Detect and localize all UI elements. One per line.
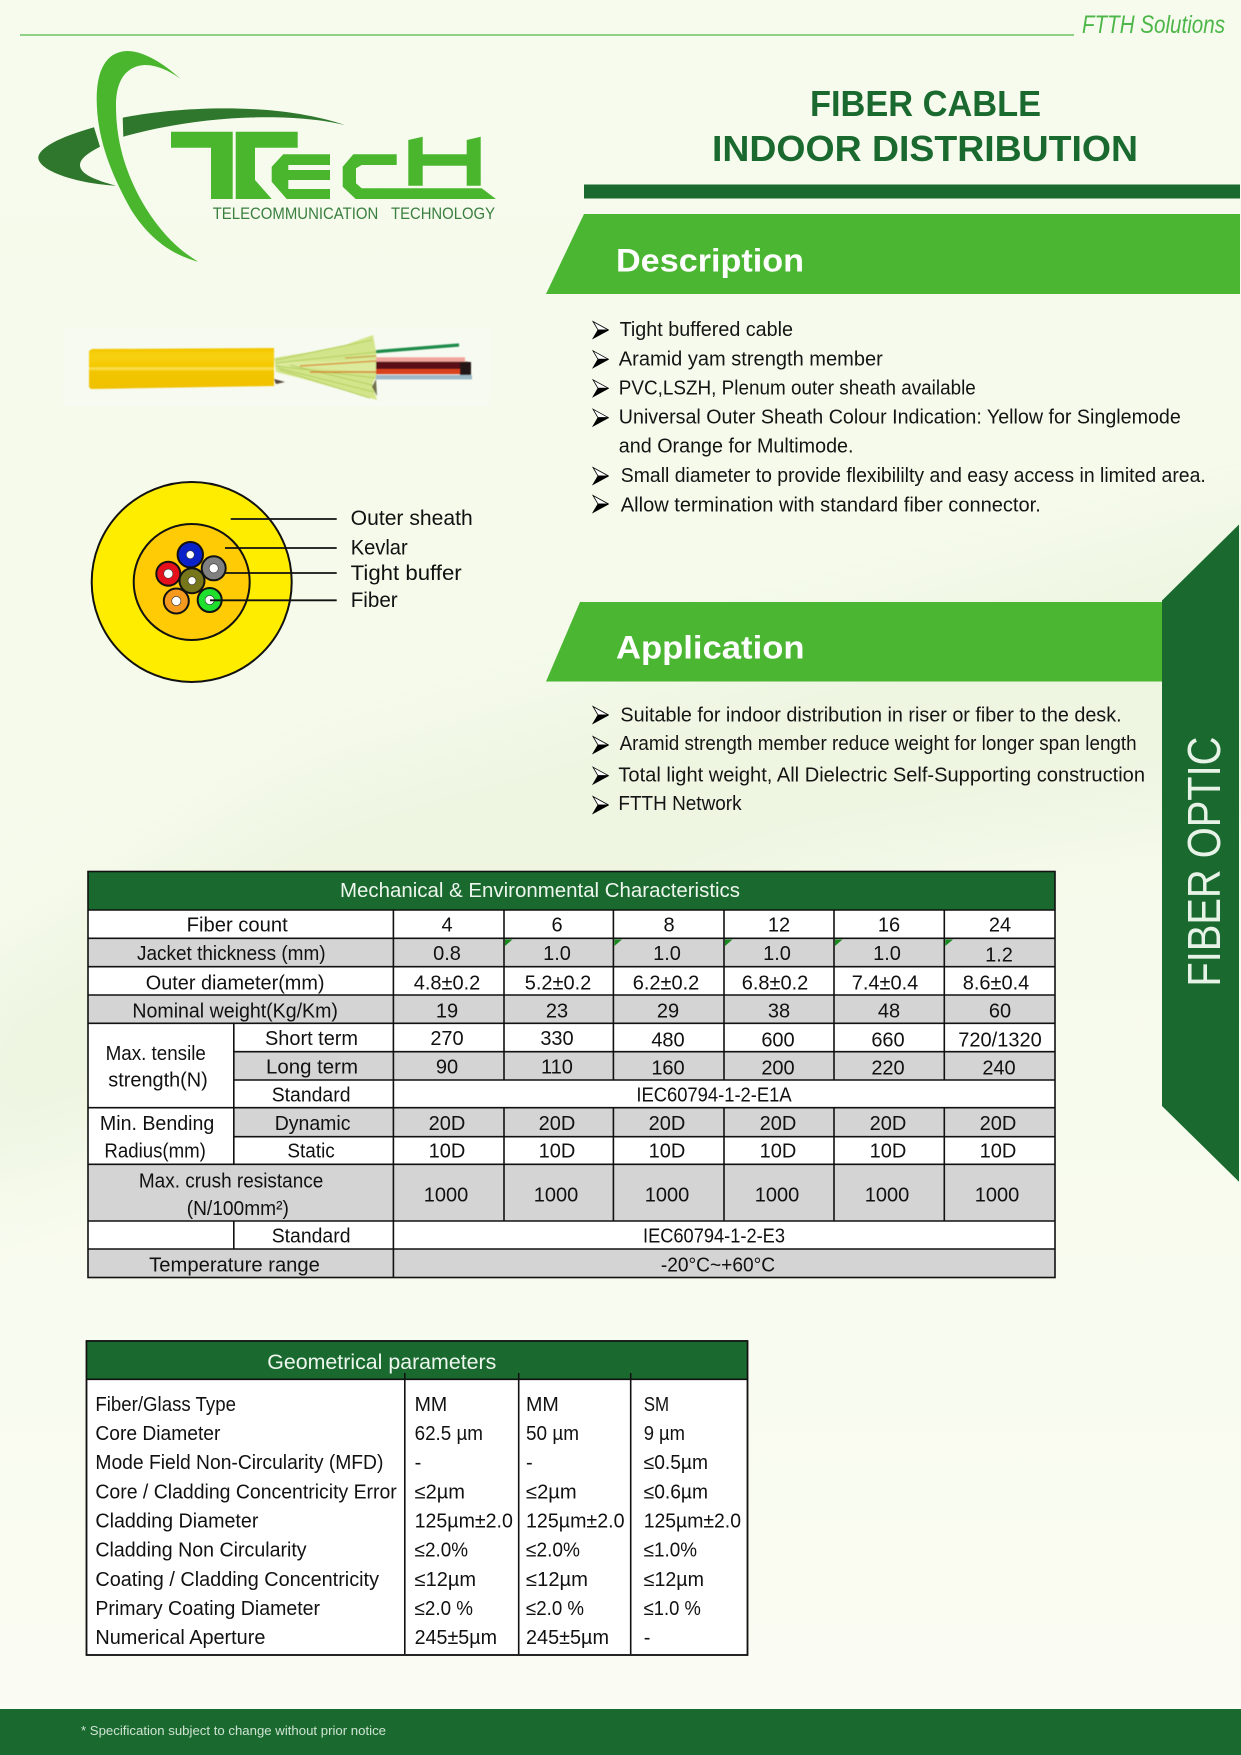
description bullets: Aramid yam strength member <box>619 348 883 370</box>
table values: 10D <box>539 1141 575 1163</box>
parameter names: Core Diameter <box>95 1423 221 1445</box>
description bullets: Tight buffered cable <box>620 319 793 341</box>
column 1 values: 125µm±2.0 <box>415 1510 513 1532</box>
parameter names: Fiber/Glass Type <box>95 1394 236 1416</box>
table values: 10D <box>649 1141 685 1163</box>
description bullets: Universal Outer Sheath Colour Indication: Yellow for Singlemode <box>619 406 1181 428</box>
row labels: (N/100mm²) <box>187 1198 289 1220</box>
table values: 0.8 <box>433 943 461 965</box>
column 3 values: 125µm±2.0 <box>644 1510 741 1532</box>
table values: 720/1320 <box>958 1030 1042 1052</box>
diagram labels <box>351 507 473 612</box>
footer band <box>0 1709 1241 1755</box>
side band: fiber optic: FIBER OPTIC <box>1178 737 1230 987</box>
table values: 20D <box>980 1113 1016 1135</box>
description banner: Description <box>616 242 804 278</box>
column 2 values: 50 µm <box>526 1423 579 1445</box>
table values: 8 <box>663 915 675 937</box>
column 1 values: ≤2µm <box>415 1481 465 1503</box>
table values: 10D <box>980 1141 1016 1163</box>
table values: -20°C~+60°C <box>661 1255 775 1277</box>
column 2 values: ≤2µm <box>526 1481 577 1503</box>
description bullets: Small diameter to provide flexibililty and easy access in limited area. <box>621 465 1206 487</box>
table values <box>414 915 1042 1277</box>
column 2 values: ≤2.0% <box>526 1540 580 1562</box>
table values: 4.8±0.2 <box>414 972 480 994</box>
table values: 24 <box>989 915 1011 937</box>
parameter names: Mode Field Non-Circularity (MFD) <box>95 1452 383 1474</box>
table values: 48 <box>878 1000 900 1022</box>
table grid <box>88 872 1055 1278</box>
row labels: Temperature range <box>149 1255 320 1277</box>
application bullets: Suitable for indoor distribution in riser or fiber to the desk. <box>620 705 1122 727</box>
description bullets: and Orange for Multimode. <box>619 435 854 457</box>
parameter names <box>95 1394 397 1649</box>
table values: 1000 <box>534 1185 578 1207</box>
table values: 220 <box>871 1058 905 1080</box>
parameter names: Cladding Non Circularity <box>95 1540 307 1562</box>
row labels: Standard <box>272 1225 350 1247</box>
table values: 480 <box>651 1030 685 1052</box>
row labels: Max. tensile <box>106 1043 206 1065</box>
table values: IEC60794-1-2-E1A <box>636 1085 792 1107</box>
parameter names: Primary Coating Diameter <box>95 1598 320 1620</box>
logo: Tech: TELECOMMUNICATION <box>213 205 378 223</box>
tight buffers <box>156 542 226 614</box>
diagram labels: Fiber <box>351 589 398 612</box>
table values: 10D <box>870 1141 906 1163</box>
table values: 20D <box>429 1113 465 1135</box>
row labels: Radius(mm) <box>104 1141 206 1163</box>
table values: 16 <box>878 915 900 937</box>
table values: 20D <box>649 1113 685 1135</box>
application banner <box>546 602 1163 682</box>
parameter names: Core / Cladding Concentricity Error <box>95 1481 397 1503</box>
column 2 values: 125µm±2.0 <box>526 1510 624 1532</box>
table values: 1000 <box>865 1185 909 1207</box>
table: mechanical and environmental characteristics <box>88 872 1055 1278</box>
table values: 160 <box>651 1058 685 1080</box>
cable photo <box>63 328 490 406</box>
table values: 6 <box>551 915 563 937</box>
row labels: Nominal weight(Kg/Km) <box>132 1000 338 1022</box>
logo: Tech <box>38 51 496 262</box>
column 3 values: ≤12µm <box>644 1569 704 1591</box>
row labels: strength(N) <box>108 1070 208 1092</box>
table values: 7.4±0.4 <box>852 972 918 994</box>
row labels: Jacket thickness (mm) <box>137 943 326 965</box>
table values: 1.2 <box>985 944 1013 966</box>
table values: 20D <box>870 1113 906 1135</box>
column 1 values: - <box>415 1452 421 1474</box>
table values: 240 <box>982 1058 1016 1080</box>
parameter names: Coating / Cladding Concentricity <box>95 1569 379 1591</box>
side band: fiber optic <box>1162 524 1239 1182</box>
table values: 23 <box>546 1000 568 1022</box>
column 3 values: ≤1.0 % <box>644 1598 701 1620</box>
table values: 20D <box>760 1113 796 1135</box>
table values: 12 <box>768 915 790 937</box>
outer sheath <box>92 482 292 682</box>
table fills <box>88 872 1055 1278</box>
table values: 1.0 <box>873 943 901 965</box>
table values: 38 <box>768 1000 790 1022</box>
panel: description <box>546 214 1240 516</box>
table values: 6.2±0.2 <box>633 972 699 994</box>
column 3 values <box>644 1394 741 1649</box>
description bullets <box>593 319 1206 516</box>
column 2 values: ≤2.0 % <box>526 1598 584 1620</box>
column 1 values: ≤12µm <box>415 1569 476 1591</box>
table body <box>86 1341 748 1655</box>
table values: 1000 <box>755 1185 799 1207</box>
table values: 660 <box>871 1030 905 1052</box>
title: FIBER CABLE <box>810 83 1041 124</box>
application banner: Application <box>616 629 804 665</box>
application bullets: Aramid strength member reduce weight for longer span length <box>620 733 1137 755</box>
row labels <box>100 915 358 1277</box>
table values: 600 <box>761 1030 795 1052</box>
table values: 29 <box>657 1000 679 1022</box>
diagram labels: Outer sheath <box>351 507 473 530</box>
column 2 values: MM <box>526 1394 559 1416</box>
table values: 60 <box>989 1000 1011 1022</box>
table values: 330 <box>540 1028 574 1050</box>
table values: 90 <box>436 1056 458 1078</box>
column 2 values: 245±5µm <box>526 1627 609 1649</box>
row labels: Fiber count <box>187 915 288 937</box>
fibers <box>164 551 218 606</box>
column 3 values: 9 µm <box>644 1423 685 1445</box>
table values: 270 <box>430 1028 464 1050</box>
column 2 values <box>526 1394 624 1649</box>
logo: Tech: TECHNOLOGY <box>391 205 495 223</box>
column 1 values: ≤2.0% <box>415 1540 468 1562</box>
table: geometrical parameters <box>86 1341 748 1655</box>
column 3 values: ≤0.5µm <box>644 1452 708 1474</box>
table values: 10D <box>760 1141 796 1163</box>
parameter names: Numerical Aperture <box>95 1627 265 1649</box>
application bullets: FTTH Network <box>618 793 743 815</box>
column 1 values <box>415 1394 513 1649</box>
description bullets: PVC,LSZH, Plenum outer sheath available <box>619 377 976 399</box>
table values: 1.0 <box>653 943 681 965</box>
column 3 values: - <box>644 1627 650 1649</box>
table values: 1000 <box>645 1185 689 1207</box>
table values: 5.2±0.2 <box>525 972 591 994</box>
column 1 values: 245±5µm <box>415 1627 497 1649</box>
diagram labels: Tight buffer <box>351 562 462 585</box>
title <box>712 83 1138 169</box>
table values: 1.0 <box>763 943 791 965</box>
application bullets: Total light weight, All Dielectric Self-Supporting construction <box>618 764 1145 786</box>
application bullets <box>593 705 1145 815</box>
table values: 6.8±0.2 <box>742 972 808 994</box>
cross-section diagram <box>92 482 473 682</box>
row labels: Long term <box>266 1056 358 1078</box>
column 3 values: ≤1.0% <box>644 1540 697 1562</box>
diagram labels: Kevlar <box>351 536 408 559</box>
column 2 values: ≤12µm <box>526 1569 588 1591</box>
table values: 20D <box>539 1113 575 1135</box>
column 3 values: ≤0.6µm <box>644 1481 708 1503</box>
title bar <box>584 184 1240 198</box>
title: INDOOR DISTRIBUTION <box>712 128 1138 169</box>
table values: 19 <box>436 1000 458 1022</box>
table values: 110 <box>541 1056 573 1078</box>
description bullets: Allow termination with standard fiber connector. <box>621 494 1041 516</box>
row labels: Short term <box>265 1028 358 1050</box>
row labels: Static <box>287 1141 335 1163</box>
table values: 1000 <box>424 1185 468 1207</box>
table heading: Mechanical & Environmental Characteristics <box>340 880 740 902</box>
table heading: Geometrical parameters <box>267 1351 496 1374</box>
footer band: * Specification subject to change without prior notice <box>81 1723 386 1738</box>
column 3 values: SM <box>644 1394 669 1416</box>
row labels: Min. Bending <box>100 1113 214 1135</box>
row labels: Standard <box>272 1085 350 1107</box>
description banner <box>546 214 1240 294</box>
row labels: Max. crush resistance <box>139 1170 323 1192</box>
column 1 values: ≤2.0 % <box>415 1598 473 1620</box>
column 1 values: 62.5 µm <box>415 1423 483 1445</box>
parameter names: Cladding Diameter <box>95 1510 259 1532</box>
table values: 200 <box>761 1058 795 1080</box>
kevlar <box>134 524 250 640</box>
table values: 1.0 <box>543 943 571 965</box>
panel: application <box>546 602 1163 815</box>
table values: 8.6±0.4 <box>963 972 1029 994</box>
row labels: Outer diameter(mm) <box>146 972 324 994</box>
column 1 values: MM <box>415 1394 447 1416</box>
table values: 10D <box>429 1141 465 1163</box>
row labels: Dynamic <box>275 1113 350 1135</box>
leader lines <box>210 519 337 600</box>
table values: 4 <box>441 915 453 937</box>
green corner ticks <box>505 940 953 946</box>
table values: IEC60794-1-2-E3 <box>643 1225 785 1247</box>
table values: 1000 <box>975 1185 1019 1207</box>
column 2 values: - <box>526 1452 533 1474</box>
